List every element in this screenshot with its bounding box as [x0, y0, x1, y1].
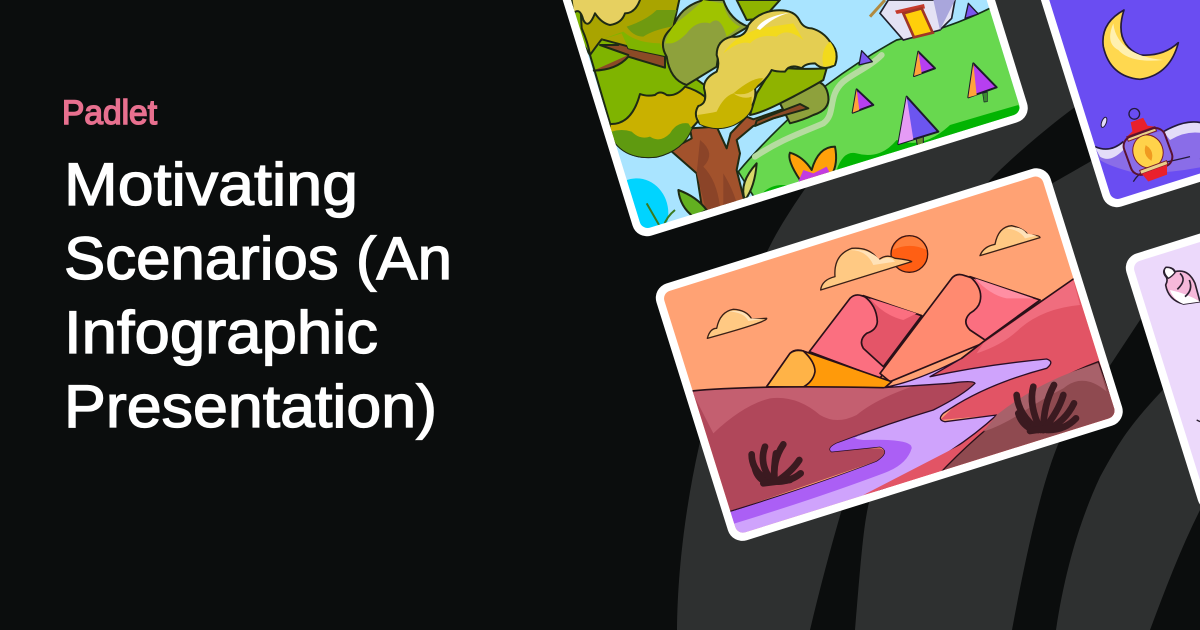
back mountain	[809, 295, 922, 378]
title: Motivating	[64, 151, 358, 218]
decorative grey curved stripes	[677, 0, 1200, 630]
front land	[683, 381, 975, 512]
moon	[1103, 10, 1178, 79]
trees	[853, 3, 997, 148]
front mountain	[880, 274, 1040, 382]
small mark	[1197, 420, 1200, 422]
shell	[1164, 267, 1200, 304]
clouds	[821, 248, 912, 290]
plant leaves	[678, 190, 707, 217]
sea	[1095, 130, 1200, 174]
title: Infographic	[64, 299, 378, 366]
card: desert mountains illustration	[650, 164, 1133, 548]
sky	[571, 0, 1020, 228]
house	[880, 0, 955, 40]
card: night sea illustration	[1040, 0, 1200, 208]
front yellow canopy	[696, 10, 837, 128]
title: Scenarios (An	[64, 225, 452, 292]
sun	[891, 236, 928, 272]
middle canopy	[663, 0, 748, 85]
right bush	[1017, 385, 1076, 431]
water drop	[1100, 116, 1108, 128]
left bush	[752, 444, 801, 483]
small canopy	[780, 82, 828, 123]
lantern	[1122, 108, 1174, 182]
tree trunk and branches	[671, 108, 785, 212]
left canopy	[571, 0, 704, 158]
red wedge	[863, 443, 963, 495]
orange dune	[767, 350, 892, 389]
title	[64, 151, 452, 440]
sky	[664, 176, 1114, 533]
right dark hill	[941, 360, 1114, 471]
river	[729, 358, 1051, 538]
logo: Padlet: Padlet	[62, 94, 158, 132]
right red hill	[873, 280, 1114, 492]
card: lavender shell illustration	[1126, 234, 1200, 504]
flower	[789, 147, 836, 187]
title: Presentation)	[64, 373, 437, 440]
hill	[738, 8, 1020, 196]
card: tree and hill illustration	[562, 0, 1028, 236]
